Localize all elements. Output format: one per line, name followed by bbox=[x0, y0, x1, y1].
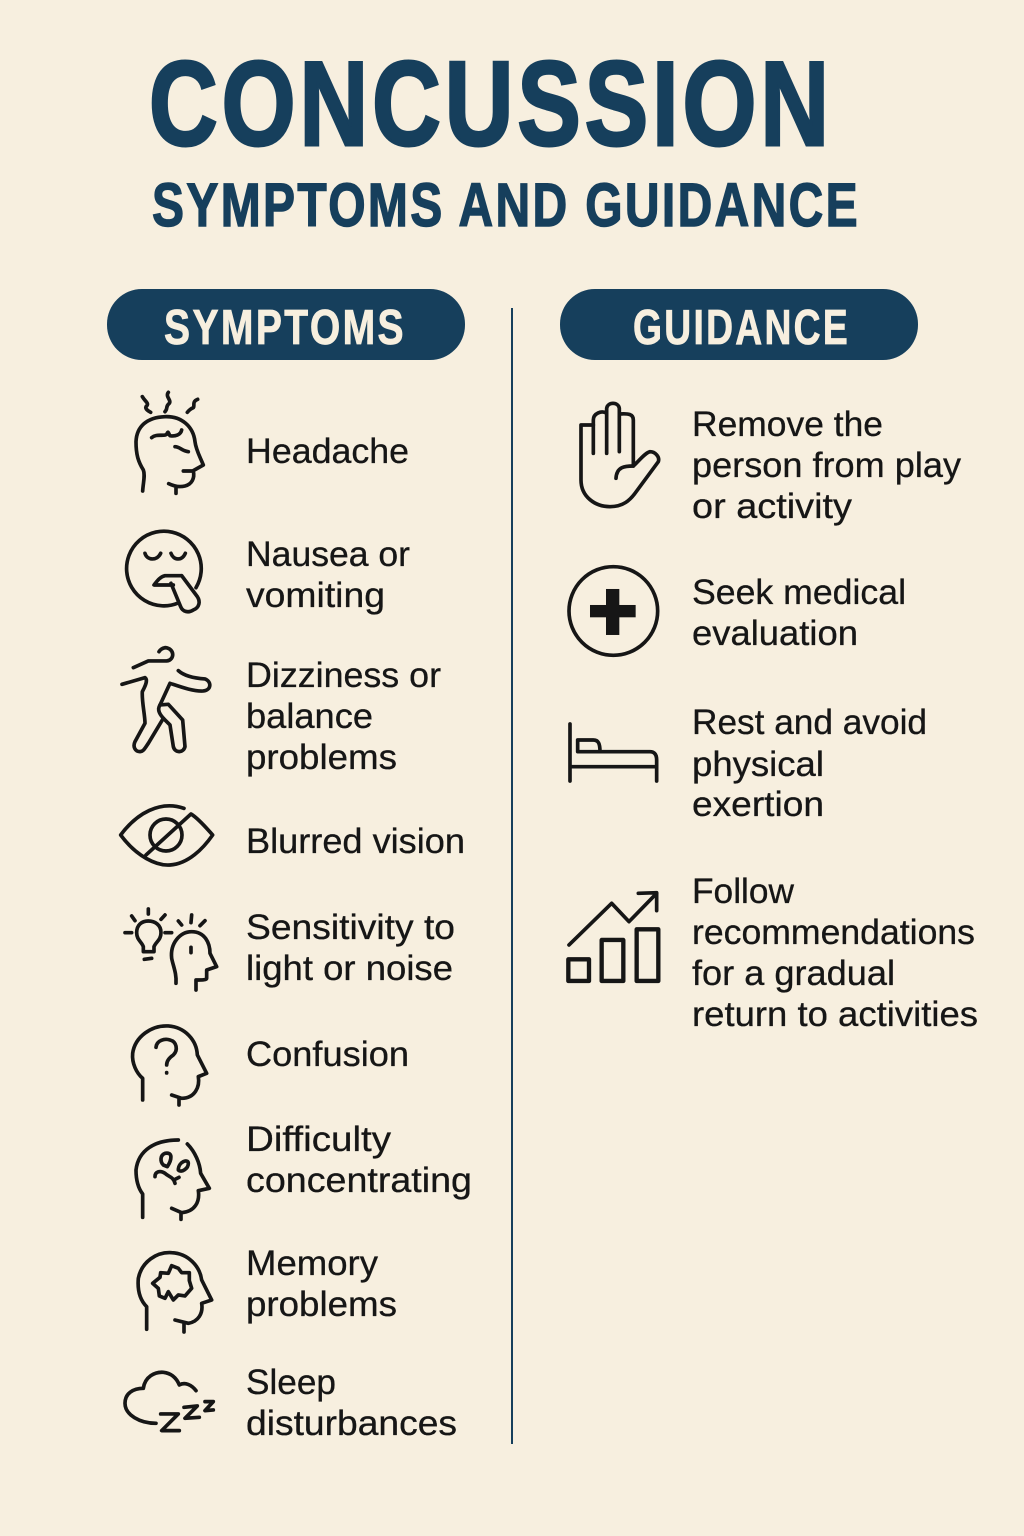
guidance: remove from play: or activity bbox=[692, 487, 853, 526]
guidance: remove from play: person from play bbox=[692, 446, 962, 485]
symptom: dizziness bbox=[122, 648, 441, 777]
guidance: remove from play: Remove the bbox=[692, 405, 883, 444]
icon: head with headache bbox=[136, 392, 203, 493]
icon: head with scattered thoughts bbox=[136, 1140, 209, 1219]
guidance heading pill: GUIDANCE bbox=[633, 301, 850, 355]
icon: crossed eye bbox=[121, 806, 213, 865]
guidance: gradual return bbox=[568, 872, 978, 1034]
guidance: gradual return: recommendations bbox=[692, 913, 975, 952]
symptom: dizziness: balance bbox=[246, 697, 373, 736]
symptom: blurred vision: Blurred vision bbox=[246, 822, 465, 861]
icon: cloud with zzz bbox=[125, 1372, 213, 1431]
symptom: headache bbox=[136, 392, 409, 493]
symptom: blurred vision bbox=[121, 806, 465, 865]
symptom: difficulty concentrating bbox=[136, 1120, 472, 1219]
guidance: gradual return: return to activities bbox=[692, 995, 978, 1034]
symptom: sleep bbox=[125, 1363, 457, 1443]
icon: head with brain bbox=[138, 1253, 212, 1332]
symptom: nausea: vomiting bbox=[246, 576, 385, 615]
guidance: rest: exertion bbox=[692, 785, 824, 824]
symptom: sensitivity bbox=[125, 908, 455, 990]
symptom: difficulty concentrating: concentrating bbox=[246, 1161, 472, 1200]
icon: head with question mark bbox=[133, 1026, 207, 1105]
symptom: memory bbox=[138, 1244, 397, 1332]
guidance: gradual return: for a gradual bbox=[692, 954, 895, 993]
guidance: rest: Rest and avoid bbox=[692, 703, 927, 742]
symptom: dizziness: problems bbox=[246, 738, 397, 777]
icon: light bulb and head bbox=[125, 909, 217, 990]
guidance: rest: physical bbox=[692, 745, 824, 784]
icon: vomiting face bbox=[127, 531, 201, 612]
symptom: nausea: Nausea or bbox=[246, 535, 410, 574]
panel: guidance bbox=[560, 289, 978, 1034]
guidance: medical evaluation: evaluation bbox=[692, 614, 858, 653]
symptom: memory: Memory bbox=[246, 1244, 379, 1283]
symptom: dizziness: Dizziness or bbox=[246, 656, 441, 695]
symptom: nausea bbox=[127, 531, 410, 615]
panel: symptoms bbox=[107, 289, 472, 1443]
guidance heading pill bbox=[560, 289, 918, 360]
title: CONCUSSION bbox=[149, 37, 833, 171]
symptom: memory: problems bbox=[246, 1285, 397, 1324]
guidance: rest bbox=[570, 703, 927, 824]
icon: raised hand bbox=[581, 403, 659, 507]
icon: medical cross in circle bbox=[569, 567, 658, 655]
symptom: sensitivity: Sensitivity to bbox=[246, 908, 455, 947]
symptom: difficulty concentrating: Difficulty bbox=[246, 1120, 392, 1159]
symptom: confusion bbox=[133, 1026, 409, 1105]
icon: rising bar chart with arrow bbox=[568, 893, 658, 981]
symptom: sensitivity: light or noise bbox=[246, 949, 453, 988]
guidance: medical evaluation bbox=[569, 567, 906, 655]
icon: bed bbox=[570, 724, 657, 781]
divider bbox=[511, 308, 513, 1444]
symptom: headache: Headache bbox=[246, 432, 409, 471]
symptoms heading pill bbox=[107, 289, 465, 360]
symptom: confusion: Confusion bbox=[246, 1035, 409, 1074]
symptom: sleep: disturbances bbox=[246, 1404, 457, 1443]
icon: staggering figure bbox=[122, 648, 210, 752]
guidance: medical evaluation: Seek medical bbox=[692, 573, 906, 612]
guidance: gradual return: Follow bbox=[692, 872, 795, 911]
symptoms heading pill: SYMPTOMS bbox=[164, 301, 406, 355]
symptom: sleep: Sleep bbox=[246, 1363, 336, 1402]
guidance: remove from play bbox=[581, 403, 962, 526]
